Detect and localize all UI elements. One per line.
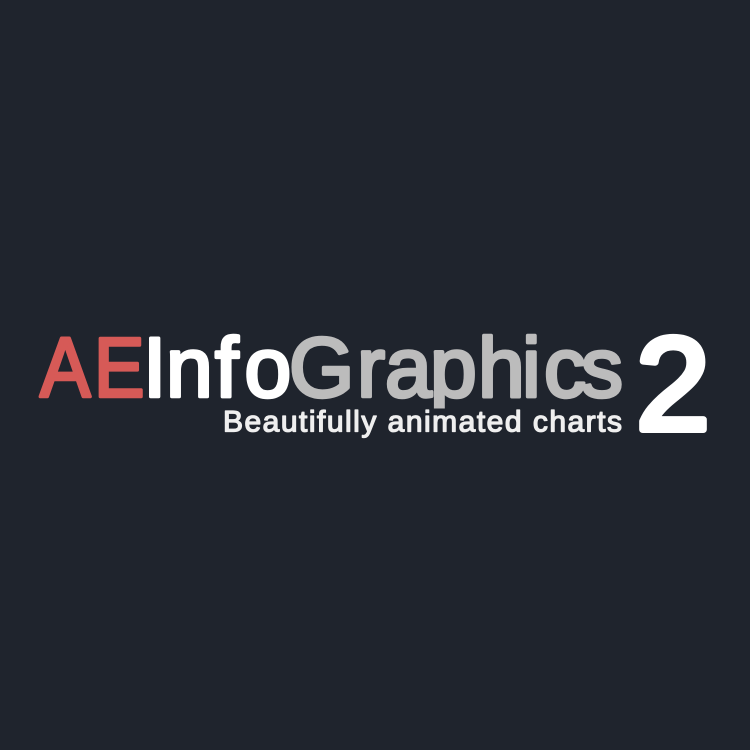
title: AE: AE <box>40 321 144 414</box>
subtitle: Beautifully animated charts <box>223 406 622 438</box>
title: Info: Info <box>143 320 291 414</box>
version number 2: 2 <box>636 310 710 458</box>
logo lockup <box>38 334 707 438</box>
title: Graphics: Graphics <box>289 320 623 414</box>
